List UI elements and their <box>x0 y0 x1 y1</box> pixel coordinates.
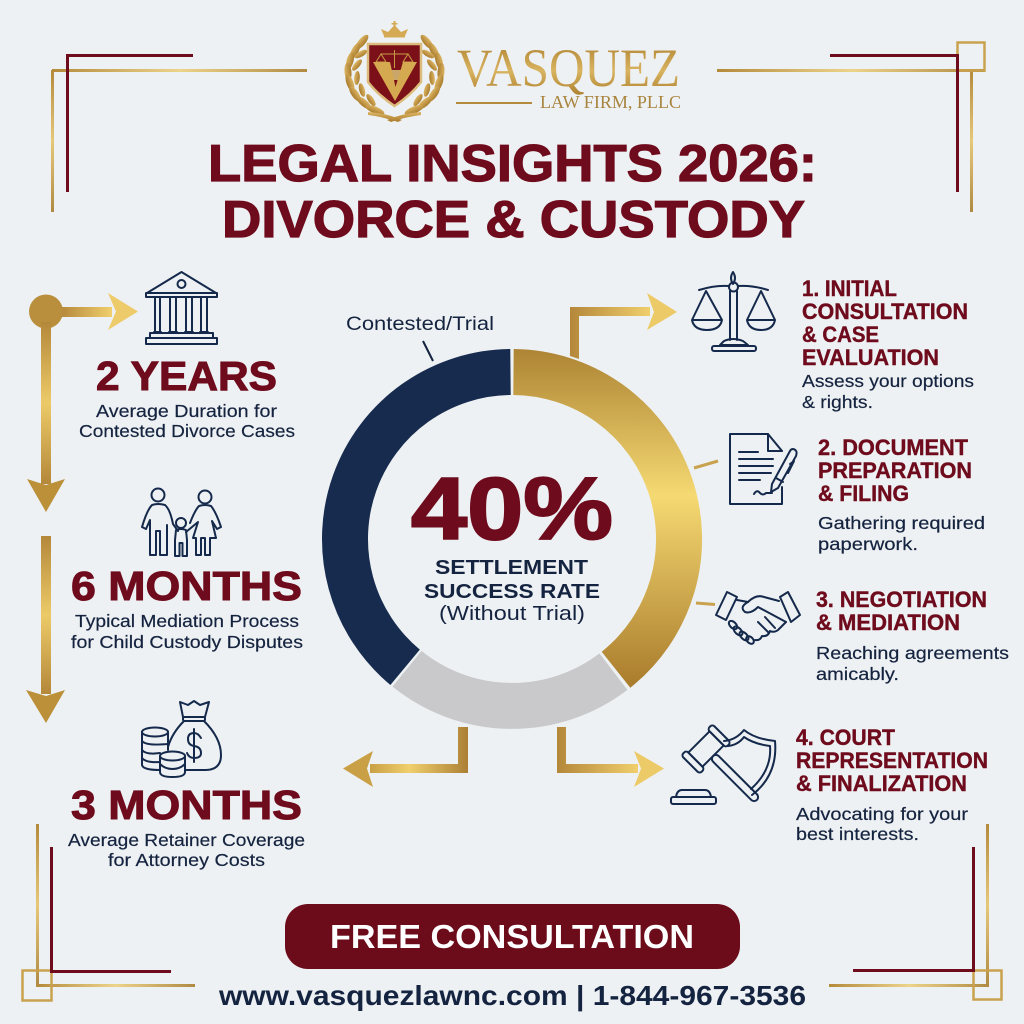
step heading: PREPARATION <box>818 458 972 483</box>
corner frame: bottom left <box>22 824 195 1000</box>
logo <box>344 21 681 122</box>
stat: 3 months <box>68 701 305 870</box>
stat value: 3 MONTHS <box>71 782 302 828</box>
stat description <box>68 830 305 870</box>
step heading: 2. DOCUMENT <box>818 435 969 460</box>
segment: settlement gold <box>514 372 679 670</box>
stat description <box>79 401 295 441</box>
step heading: 4. COURT <box>796 725 896 750</box>
corner frame: bottom right <box>829 824 1002 1000</box>
stat value: 2 YEARS <box>96 353 277 399</box>
donut label: contested <box>346 314 494 361</box>
stat description: Typical Mediation Process <box>75 611 299 631</box>
stat description: for Attorney Costs <box>108 850 265 870</box>
icon: handshake <box>716 592 800 645</box>
step description <box>816 643 1009 684</box>
title: LEGAL INSIGHTS 2026: <box>208 135 817 193</box>
stat value: 6 MONTHS <box>71 563 302 609</box>
logo subtitle: LAW FIRM, PLLC <box>540 92 681 112</box>
logo wordmark: VASQUEZ <box>457 38 680 98</box>
logo rule <box>456 102 532 104</box>
stat description: for Child Custody Disputes <box>71 632 303 652</box>
call to action button <box>285 904 740 969</box>
step heading <box>802 276 968 370</box>
step 4 <box>671 724 988 844</box>
stat description: Average Retainer Coverage <box>68 830 305 850</box>
stat: 2 years <box>79 272 295 441</box>
connector arrow: bottom left <box>343 727 468 787</box>
step heading <box>818 435 972 506</box>
step description: & rights. <box>802 392 873 412</box>
step description <box>802 371 974 412</box>
connector arrow: to step 1 <box>570 293 677 359</box>
step description: Advocating for your <box>796 804 968 824</box>
step heading: EVALUATION <box>802 345 939 370</box>
step description: Reaching agreements <box>816 643 1009 663</box>
step heading: & CASE <box>802 322 879 347</box>
arrow: start dot to right <box>29 293 138 330</box>
logo crown <box>381 21 408 38</box>
step heading: & FILING <box>818 481 909 506</box>
title: DIVORCE & CUSTODY <box>222 191 805 249</box>
icon: gavel and shield <box>671 724 775 815</box>
arrow: down to three months <box>26 536 65 723</box>
left timeline arrows <box>26 293 138 723</box>
donut value: 40% <box>411 459 613 558</box>
step heading: CONSULTATION <box>802 299 968 324</box>
segment: contested navy <box>345 372 510 667</box>
step description: paperwork. <box>818 534 918 554</box>
step description <box>796 804 968 844</box>
contact line: www.vasquezlawnc.com | 1-844-967-3536 <box>218 980 806 1011</box>
stat description: Contested Divorce Cases <box>79 421 295 441</box>
donut chart <box>345 314 679 706</box>
stat: 6 months <box>71 488 303 652</box>
step description: amicably. <box>816 664 899 684</box>
donut caption: SETTLEMENT <box>435 556 589 579</box>
donut label: contested: Contested/Trial <box>346 314 494 335</box>
donut caption <box>424 556 600 625</box>
corner frame: top left <box>51 54 307 212</box>
step 3 <box>716 587 1009 684</box>
segment: grey remainder <box>407 669 613 706</box>
step description: best interests. <box>796 824 919 844</box>
step heading: 3. NEGOTIATION <box>816 587 987 612</box>
step heading <box>796 725 988 796</box>
stat description <box>71 611 303 652</box>
logo wreath right <box>387 33 445 122</box>
icon: money bag and coins <box>142 701 221 777</box>
step heading: REPRESENTATION <box>796 748 988 773</box>
arrow: down to six months <box>27 322 65 512</box>
step heading <box>816 587 987 635</box>
connector: to step 2 <box>694 461 718 468</box>
stat description: Average Duration for <box>96 401 277 421</box>
icon: scales of justice <box>692 272 775 351</box>
title <box>208 135 817 249</box>
logo shield <box>368 44 421 106</box>
step 1 <box>692 272 974 412</box>
step description <box>818 513 985 554</box>
step heading: & MEDIATION <box>816 610 960 635</box>
icon: courthouse <box>146 272 217 344</box>
step description: Assess your options <box>802 371 974 391</box>
connector arrow: to step 4 <box>557 727 664 787</box>
donut caption: (Without Trial) <box>439 603 585 625</box>
call to action button: FREE CONSULTATION <box>330 918 694 955</box>
icon: family <box>142 488 221 556</box>
step heading: 1. INITIAL <box>802 276 897 301</box>
corner frame: top right <box>717 42 985 212</box>
icon: document and pen <box>730 434 797 504</box>
step description: Gathering required <box>818 513 985 533</box>
step 2 <box>730 434 985 554</box>
logo wreath left <box>344 33 402 122</box>
connector: to step 3 <box>696 603 715 604</box>
donut caption: SUCCESS RATE <box>424 580 600 603</box>
step heading: & FINALIZATION <box>796 771 967 796</box>
